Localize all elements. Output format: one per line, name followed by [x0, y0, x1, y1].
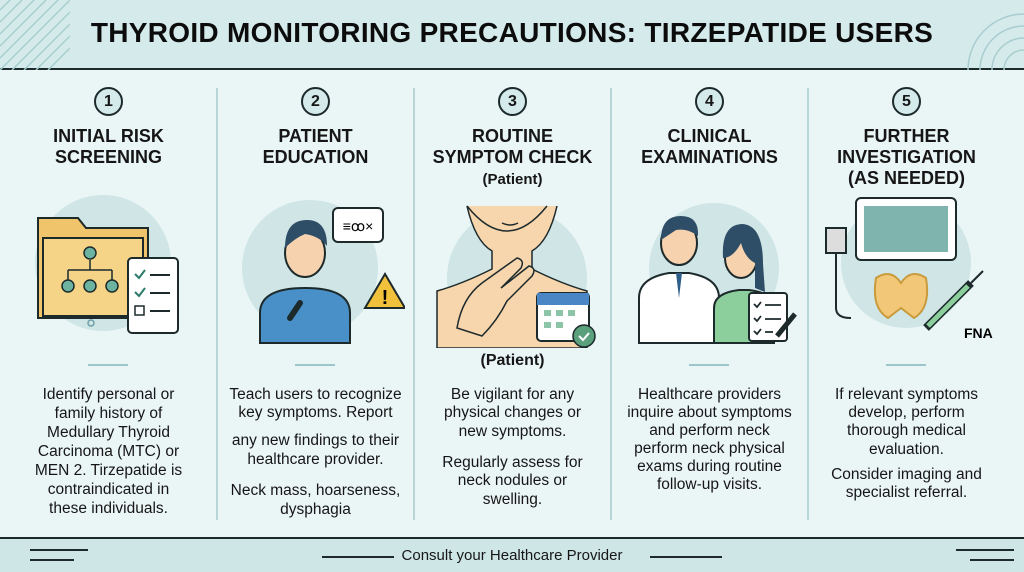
text 3: physical changes or	[444, 404, 581, 421]
footer text: Consult your Healthcare Provider	[402, 547, 622, 564]
icon: ultrasound, thyroid, syringe	[825, 197, 993, 341]
text 5	[831, 386, 982, 501]
heading 2: PATIENT	[278, 126, 353, 146]
text 3: neck nodules or	[458, 472, 567, 489]
text 4: and perform neck	[649, 422, 770, 439]
decorative stripes	[0, 0, 70, 70]
footer band	[0, 537, 1024, 572]
text 1: contraindicated in	[48, 481, 169, 498]
number 3: 3	[508, 93, 517, 110]
icon: neck with calendar	[436, 206, 596, 348]
panel: patient education	[229, 87, 405, 518]
text 5: If relevant symptoms	[835, 386, 978, 403]
panel: initial risk screening	[35, 87, 182, 517]
text 2: Neck mass, hoarseness,	[231, 482, 400, 499]
number 2: 2	[311, 93, 320, 110]
number 4	[695, 87, 724, 116]
heading 5: INVESTIGATION	[837, 147, 976, 167]
heading 3: (Patient)	[482, 171, 542, 188]
text 2: key symptoms. Report	[238, 404, 393, 421]
heading 3	[433, 126, 592, 188]
header band	[0, 0, 1024, 70]
title: THYROID MONITORING PRECAUTIONS: TIRZEPATIDE USERS	[91, 17, 933, 48]
text 2: Teach users to recognize	[229, 386, 402, 403]
text 3: Be vigilant for any	[451, 386, 574, 403]
number 1	[94, 87, 123, 116]
heading 2: EDUCATION	[263, 147, 368, 167]
number 5	[892, 87, 921, 116]
heading 2	[263, 126, 368, 167]
text 4: Healthcare providers	[638, 386, 781, 403]
text 3: swelling.	[483, 491, 542, 508]
number 2	[301, 87, 330, 116]
text 1: Carcinoma (MTC) or	[38, 443, 179, 460]
heading 5	[837, 126, 976, 188]
icon: folder and clipboard	[35, 195, 179, 334]
text 2: healthcare provider.	[247, 451, 384, 468]
panel: routine symptom check	[433, 87, 596, 508]
heading 1	[53, 126, 164, 167]
text 1: family history of	[55, 405, 162, 422]
heading 4	[641, 126, 778, 167]
panel: further investigation	[825, 87, 993, 501]
text 1: these individuals.	[49, 500, 168, 517]
text 5: specialist referral.	[846, 484, 967, 501]
text 5: thorough medical	[847, 422, 966, 439]
text 1: Medullary Thyroid	[47, 424, 170, 441]
icon: ultrasound, thyroid, syringe: FNA	[964, 325, 993, 341]
text 3: Regularly assess for	[442, 454, 583, 471]
heading 5: (AS NEEDED)	[848, 168, 965, 188]
panel: clinical examinations	[627, 87, 797, 493]
text 3	[442, 386, 583, 508]
text 5: Consider imaging and	[831, 466, 982, 483]
text 3: new symptoms.	[459, 423, 566, 440]
heading 4: EXAMINATIONS	[641, 147, 778, 167]
text 4: inquire about symptoms	[627, 404, 792, 421]
heading 1: INITIAL RISK	[53, 126, 164, 146]
heading 1: SCREENING	[55, 147, 162, 167]
text 5: evaluation.	[869, 441, 944, 458]
text 4: exams during routine	[637, 458, 782, 475]
text 2: dysphagia	[280, 501, 351, 518]
heading 3: ROUTINE	[472, 126, 553, 146]
number 3	[498, 87, 527, 116]
text 2: any new findings to their	[232, 432, 399, 449]
icon: person with speech bubble: !	[382, 287, 388, 309]
text 1: Identify personal or	[43, 386, 174, 403]
heading 5: FURTHER	[864, 126, 950, 146]
text 4: perform neck physical	[634, 440, 785, 457]
number 5: 5	[902, 93, 911, 110]
text 2	[229, 386, 402, 518]
icon: person with speech bubble	[242, 200, 405, 344]
heading 3: SYMPTOM CHECK	[433, 147, 592, 167]
text 4	[627, 386, 792, 493]
text 4: follow-up visits.	[657, 476, 762, 493]
icon: person with speech bubble: ≡ꝏ×	[343, 218, 373, 234]
number 1: 1	[104, 93, 113, 110]
text 1: MEN 2. Tirzepatide is	[35, 462, 182, 479]
number 4: 4	[705, 93, 714, 110]
text 1	[35, 386, 182, 517]
icon: doctor and patient	[638, 203, 797, 344]
sublabel patient: (Patient)	[480, 352, 544, 369]
text 5: develop, perform	[848, 404, 965, 421]
heading 4: CLINICAL	[668, 126, 752, 146]
